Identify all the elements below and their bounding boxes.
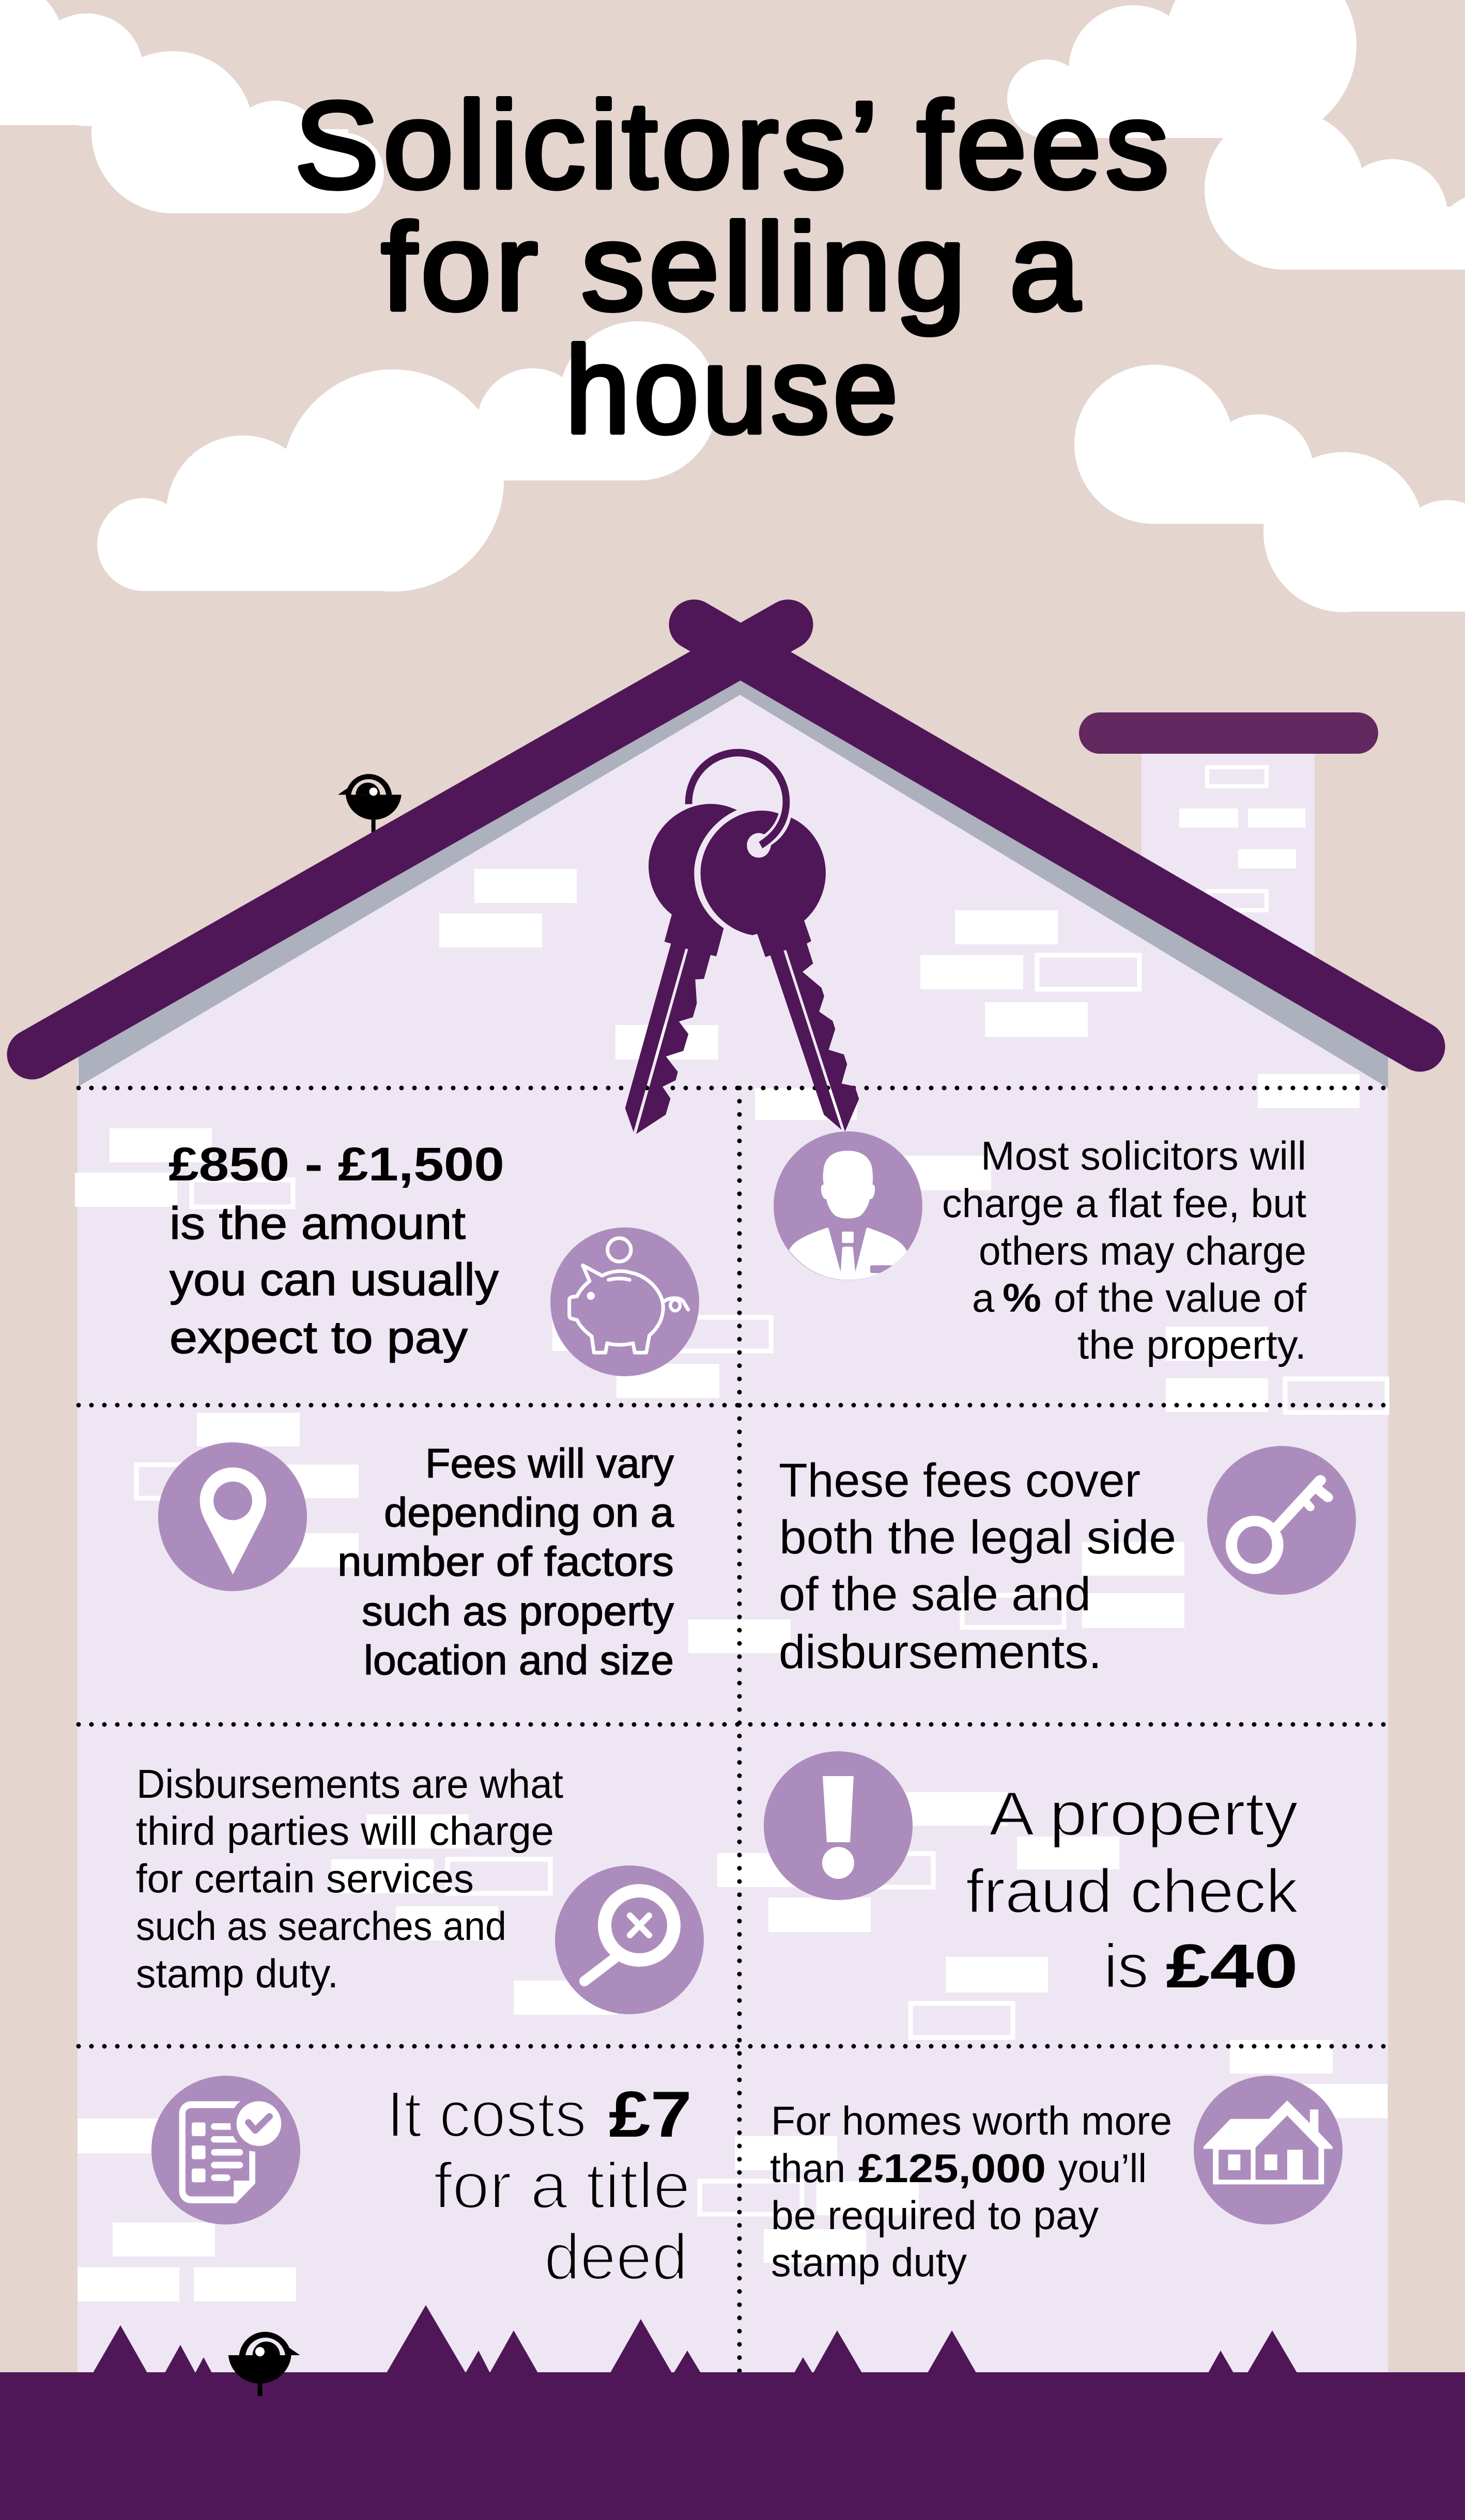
fees vary text: such as property: [362, 1588, 674, 1634]
cloud lower right: [1074, 365, 1465, 612]
fees cover text: [779, 1454, 1176, 1678]
fraud check text: fraud check: [966, 1857, 1299, 1926]
panel: fees vary: [158, 1440, 674, 1683]
icon: piggy bank: [550, 1227, 699, 1376]
house wall: [78, 672, 1388, 2376]
cloud lower left: [97, 321, 718, 592]
fees cover text: disbursements.: [779, 1626, 1102, 1678]
fees vary text: depending on a: [384, 1489, 674, 1535]
cost text: [168, 1138, 504, 1363]
title: Solicitors’ fees: [295, 77, 1173, 214]
icon: magnifying glass: [555, 1865, 704, 2014]
fees vary text: number of factors: [337, 1538, 674, 1584]
cost text: you can usually: [169, 1254, 499, 1305]
flat fee text: a: [972, 1275, 995, 1320]
dotted grid: [79, 1088, 1390, 2372]
disbursements text: third parties will charge: [136, 1808, 554, 1854]
flat fee text: of the value of: [1054, 1275, 1306, 1320]
roof underside shadow: [79, 672, 1388, 1088]
stamp duty text: be required to pay: [771, 2192, 1099, 2238]
title: house: [565, 322, 902, 459]
disbursements text: such as searches and: [136, 1903, 506, 1949]
flat fee text: [942, 1133, 1306, 1367]
fees cover text: of the sale and: [779, 1568, 1091, 1621]
chimney: [1079, 712, 1378, 1106]
title deed text: [387, 2078, 692, 2293]
stamp duty text: you’ll: [1058, 2145, 1147, 2191]
panel: fraud check: [764, 1751, 1299, 2001]
cost text: is the amount: [169, 1197, 466, 1249]
cost text: expect to pay: [169, 1312, 468, 1363]
fees cover text: both the legal side: [779, 1511, 1176, 1564]
fraud check text: £40: [1166, 1932, 1298, 2001]
panel: flat fee or percentage: [774, 1131, 1306, 1367]
stamp duty text: [770, 2098, 1172, 2285]
fraud check text: [966, 1779, 1299, 2001]
wall bricks: [75, 869, 1387, 2301]
fees vary text: [337, 1440, 674, 1683]
fees vary text: location and size: [364, 1637, 674, 1683]
icon: solicitor: [774, 1131, 930, 1283]
flat fee text: the property.: [1077, 1322, 1306, 1367]
title deed text: £7: [609, 2078, 692, 2151]
stamp duty text: £125,000: [858, 2145, 1046, 2191]
fees cover text: These fees cover: [779, 1454, 1140, 1507]
stamp duty text: stamp duty: [771, 2239, 967, 2285]
fraud check text: is: [1104, 1932, 1149, 2001]
cloud top left: [0, 0, 384, 213]
disbursements text: [136, 1761, 563, 1996]
panel: disbursements: [136, 1761, 704, 2014]
bird on roof: [338, 774, 402, 835]
bird on ground: [228, 2332, 300, 2396]
ground with grass spikes: [0, 2305, 1465, 2520]
icon: location pin: [158, 1442, 307, 1591]
disbursements text: for certain services: [136, 1856, 474, 1901]
title deed text: deed: [544, 2220, 688, 2293]
stamp duty text: For homes worth more: [771, 2098, 1172, 2143]
panel: what fees cover: [779, 1446, 1356, 1678]
title: for selling a: [381, 199, 1084, 336]
title deed text: for a title: [434, 2149, 690, 2222]
title: [295, 77, 1173, 459]
flat fee text: charge a flat fee, but: [942, 1180, 1306, 1226]
flat fee text: %: [1003, 1275, 1041, 1320]
icon: checklist document: [151, 2076, 300, 2225]
icon: key: [1207, 1446, 1356, 1595]
icon: exclamation mark: [764, 1751, 913, 1900]
panel: typical cost: [168, 1138, 699, 1376]
fees vary text: Fees will vary: [425, 1440, 674, 1486]
cost text: £850 - £1,500: [168, 1138, 504, 1191]
cloud right: [1205, 119, 1465, 270]
title deed text: It costs: [387, 2078, 587, 2151]
flat fee text: others may charge: [979, 1228, 1306, 1273]
icon: house keys on ring: [625, 753, 859, 1134]
cloud top right: [1007, 0, 1356, 142]
icon: house: [1194, 2076, 1343, 2225]
disbursements text: Disbursements are what: [136, 1761, 563, 1807]
disbursements text: stamp duty.: [136, 1951, 338, 1996]
panel: stamp duty: [770, 2076, 1343, 2285]
fraud check text: A property: [989, 1779, 1298, 1848]
roof: [32, 625, 1420, 1054]
stamp duty text: than: [770, 2145, 845, 2191]
panel: title deed: [151, 2076, 692, 2293]
flat fee text: Most solicitors will: [981, 1133, 1306, 1178]
